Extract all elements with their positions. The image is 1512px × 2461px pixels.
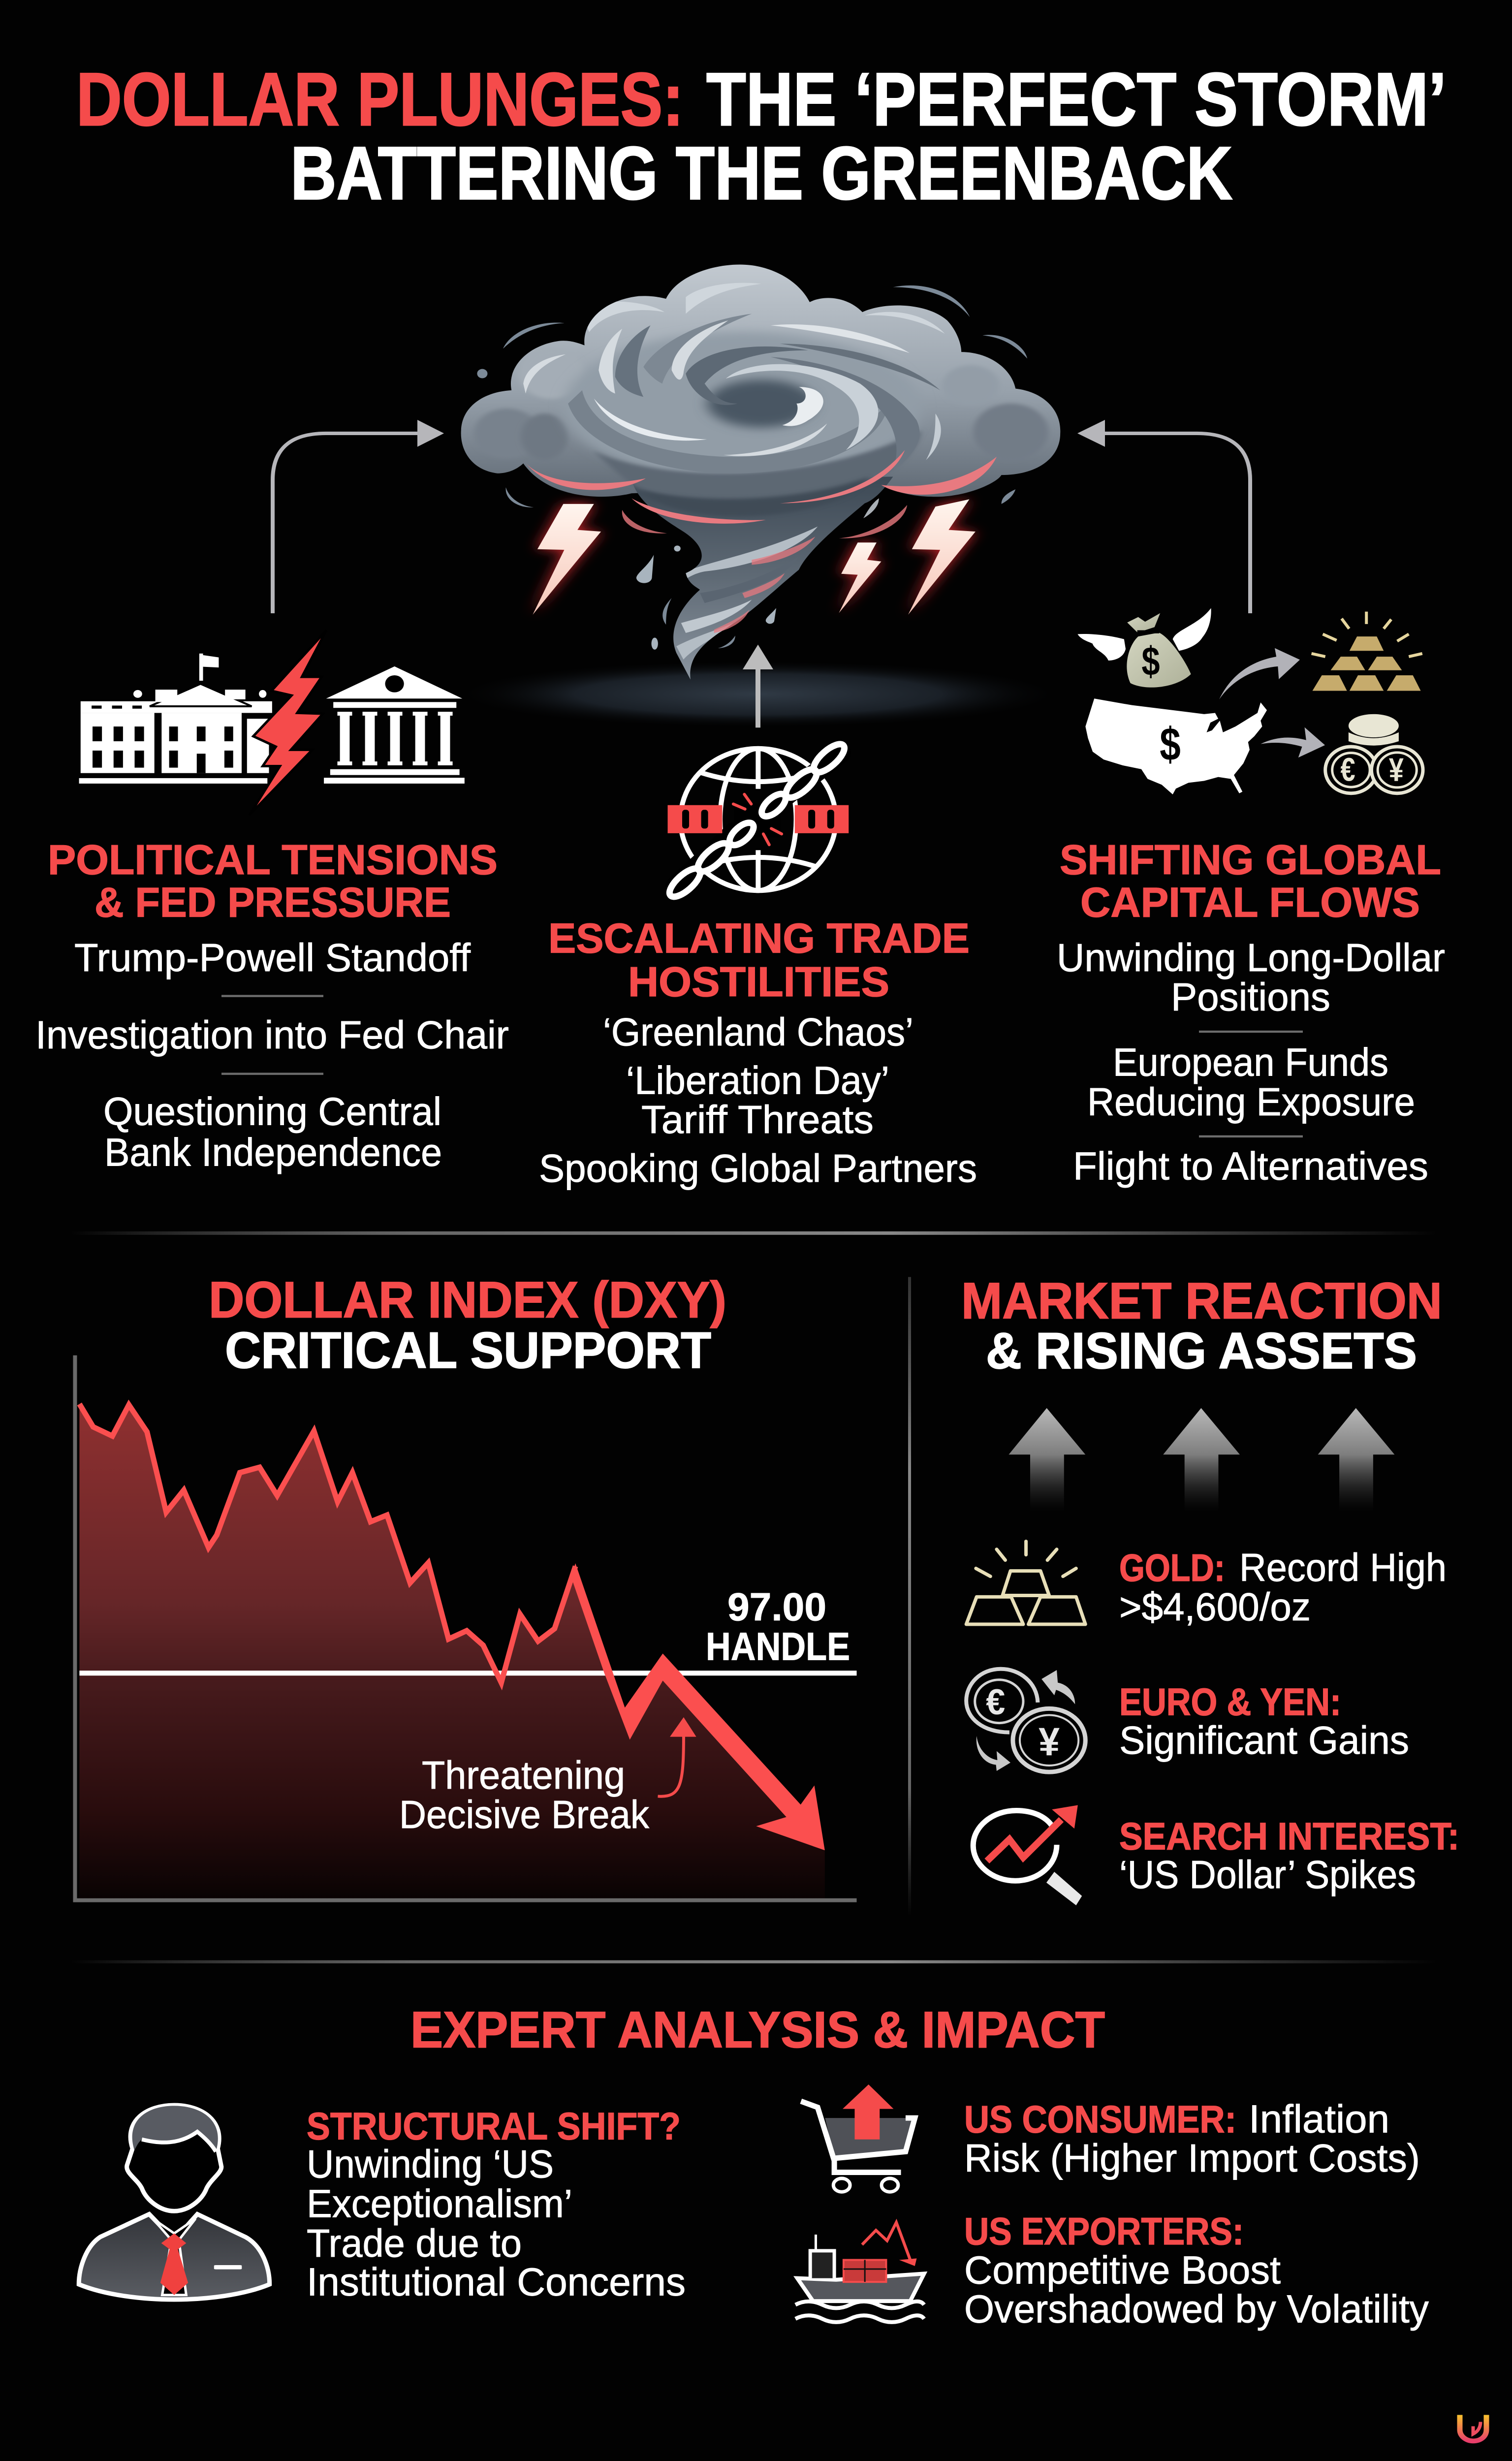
bullet list: Unwinding Long-Dollar xyxy=(1057,936,1445,979)
consumer text: US CONSUMER: xyxy=(964,2098,1236,2141)
heading: SHIFTING GLOBAL xyxy=(1060,836,1441,883)
heading: POLITICAL TENSIONS xyxy=(48,836,498,883)
euro and yen label: EURO & YEN: xyxy=(1119,1680,1341,1723)
icon: businessman xyxy=(79,2105,270,2300)
breakdown arrow xyxy=(571,1563,825,1850)
lightning bolts xyxy=(533,499,976,615)
panel: dollar index chart: HANDLE xyxy=(706,1624,850,1668)
gold label: GOLD: xyxy=(1119,1546,1225,1589)
callout text: Threatening xyxy=(422,1753,625,1797)
panel: expert analysis: Risk (Higher Import Costs) xyxy=(964,2136,1420,2180)
panel: dollar index chart: CRITICAL SUPPORT xyxy=(225,1322,711,1379)
panel: market reaction: & RISING ASSETS xyxy=(986,1322,1417,1379)
light swirl streaks xyxy=(594,399,707,441)
panel: dollar index chart: Decisive Break xyxy=(399,1793,649,1836)
axes xyxy=(75,1356,857,1900)
panel: dollar index chart xyxy=(75,1271,857,1900)
icon: euro and yen exchange: ¥ xyxy=(1039,1720,1060,1764)
icon: shopping cart with rising arrow xyxy=(801,2084,915,2192)
chart area xyxy=(79,1404,825,1899)
icon: capital flight from US to gold and currencies xyxy=(1077,608,1423,794)
icon: globe with broken chain xyxy=(665,739,849,901)
panel: expert analysis: Institutional Concerns xyxy=(307,2260,686,2303)
bullet list: ‘Greenland Chaos’ xyxy=(603,1010,914,1054)
panel: expert analysis: Competitive Boost xyxy=(964,2248,1281,2292)
debris and drops xyxy=(477,285,1027,650)
arrow: left cause to storm xyxy=(273,420,444,613)
panel: market reaction: >$4,600/oz xyxy=(1119,1585,1311,1629)
title line 1 red: DOLLAR PLUNGES: xyxy=(76,57,684,141)
panel: expert analysis xyxy=(79,2001,1429,2331)
arrow: right cause to storm xyxy=(1077,420,1250,613)
panel: capital flows xyxy=(1057,608,1445,1188)
icon: storm cloud with tornado xyxy=(461,264,1060,680)
icon: watermark logo xyxy=(1460,2415,1486,2441)
heading: MARKET REACTION xyxy=(961,1272,1442,1329)
panel: capital flows: Reducing Exposure xyxy=(1087,1080,1415,1124)
icon: capital flight from US to gold and currencies: $ xyxy=(1160,719,1181,771)
rising arrows xyxy=(1008,1408,1394,1512)
panel: capital flows: Flight to Alternatives xyxy=(1073,1144,1428,1188)
panel: market reaction: Record High xyxy=(1239,1546,1447,1589)
red rim light arcs xyxy=(523,450,997,633)
panel: market reaction: ‘US Dollar’ Spikes xyxy=(1119,1853,1416,1896)
ground haze xyxy=(453,660,1063,728)
icon: capital flight from US to gold and currencies: ¥ xyxy=(1389,751,1404,788)
panel: expert analysis: Trade due to xyxy=(307,2221,522,2265)
cloud body xyxy=(461,264,1060,497)
title xyxy=(76,57,1447,215)
panel: capital flows: CAPITAL FLOWS xyxy=(1080,879,1420,926)
panel: capital flows: European Funds xyxy=(1113,1041,1388,1084)
panel: political tensions: & FED PRESSURE xyxy=(94,879,451,926)
swirl mass xyxy=(564,332,921,482)
97.00 handle label: 97.00 xyxy=(727,1585,826,1629)
panel: expert analysis: Overshadowed by Volatility xyxy=(964,2287,1429,2331)
swirl core xyxy=(707,379,816,427)
panel: trade hostilities: Spooking Global Partners xyxy=(539,1146,977,1190)
callout arrow xyxy=(658,1735,684,1797)
panel: market reaction xyxy=(961,1272,1459,1905)
panel: capital flows: Positions xyxy=(1171,975,1330,1019)
panel: market reaction: Significant Gains xyxy=(1119,1718,1409,1762)
structural shift text: STRUCTURAL SHIFT? xyxy=(307,2105,681,2147)
bullet list: Trump-Powell Standoff xyxy=(74,936,471,979)
arrow: center cause to storm xyxy=(743,645,773,727)
dark swirl bands xyxy=(615,325,651,397)
panel: trade hostilities xyxy=(539,739,977,1190)
panel: political tensions: Bank Independence xyxy=(104,1130,442,1174)
panel: expert analysis: Unwinding ‘US xyxy=(307,2142,554,2186)
panel: trade hostilities: ‘Liberation Day’ xyxy=(626,1059,889,1103)
funnel xyxy=(631,476,893,680)
icon: gold bars xyxy=(966,1542,1085,1624)
icon: capital flight from US to gold and currencies: $ xyxy=(1141,638,1160,684)
heading: ESCALATING TRADE xyxy=(548,915,970,962)
panel: political tensions: Questioning Central xyxy=(103,1089,441,1133)
lightning glow xyxy=(533,499,976,615)
icon: cargo ship with falling arrow xyxy=(795,2222,924,2322)
funnel streaks xyxy=(686,527,818,578)
exporters text: US EXPORTERS: xyxy=(964,2210,1244,2253)
title line 2: BATTERING THE GREENBACK xyxy=(290,131,1232,215)
panel: political tensions xyxy=(35,630,509,1174)
cloud details xyxy=(474,283,1048,660)
panel: trade hostilities: Tariff Threats xyxy=(641,1098,874,1141)
icon: search trend xyxy=(973,1805,1082,1905)
line chart xyxy=(75,1356,857,1900)
icon: euro and yen exchange: € xyxy=(986,1682,1005,1722)
dollar index line xyxy=(79,1404,575,1683)
97.00 support line xyxy=(79,1671,857,1675)
panel: political tensions: Investigation into Fed Chair xyxy=(35,1013,509,1057)
heading: EXPERT ANALYSIS & IMPACT xyxy=(410,2001,1105,2058)
icon: white house vs fed with lightning xyxy=(79,630,465,815)
bank xyxy=(326,666,462,698)
icon: capital flight from US to gold and currencies: € xyxy=(1341,751,1355,788)
heading: DOLLAR INDEX (DXY) xyxy=(209,1271,726,1328)
panel: expert analysis: Inflation xyxy=(1249,2097,1389,2141)
panel: expert analysis: Exceptionalism’ xyxy=(307,2182,572,2225)
icon: euro and yen exchange xyxy=(966,1669,1085,1772)
panel: trade hostilities: HOSTILITIES xyxy=(628,958,889,1006)
